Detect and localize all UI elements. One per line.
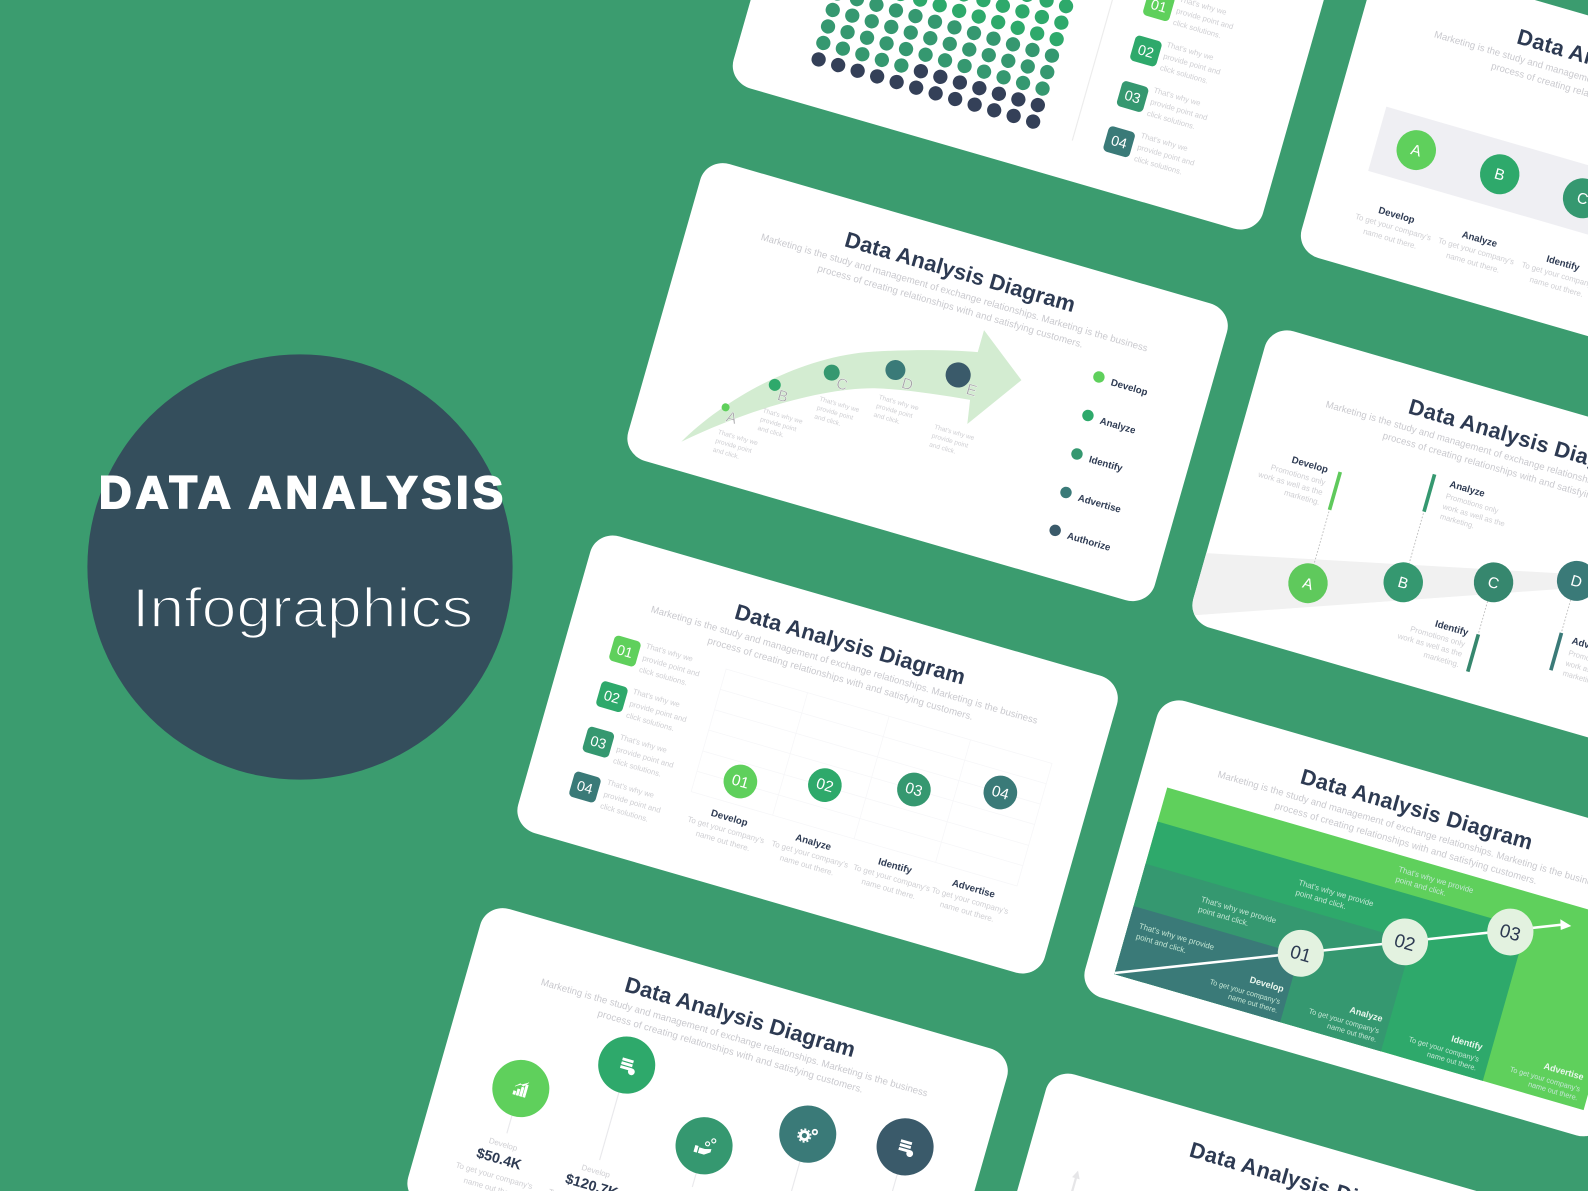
item: develop: Develop <box>1290 455 1329 476</box>
legend item 03: That's why we <box>619 733 668 755</box>
heading: data analysis: DATA ANALYSIS <box>99 467 503 518</box>
marker letters: D <box>900 375 915 394</box>
numbered circles: 03 <box>1497 919 1523 945</box>
grey wedge <box>1189 451 1588 743</box>
panel: curved arrow slide <box>622 158 1233 607</box>
staircase bands <box>1114 787 1588 1110</box>
step labels: To get your company's <box>1408 1035 1480 1064</box>
step labels: Develop <box>1249 975 1285 994</box>
panel: bottom right slide <box>968 1068 1572 1191</box>
marker captions: That's why we <box>717 429 759 447</box>
marker captions: provide point <box>816 405 854 422</box>
item: develop <box>1253 447 1343 511</box>
icon circle: gears <box>772 1099 843 1170</box>
card <box>512 530 1123 979</box>
marker captions: That's why we <box>818 396 860 414</box>
icon circle: hand <box>669 1110 739 1181</box>
step labels: Identify <box>1450 1034 1484 1052</box>
panel: grid slide <box>512 530 1123 979</box>
card <box>1187 325 1588 772</box>
legend item 03: 03 <box>1123 88 1142 108</box>
title: Data Analysis Diagram <box>622 972 858 1062</box>
circle <box>87 354 513 780</box>
column labels: Analyze <box>794 832 833 853</box>
legend item 03: click solutions. <box>612 756 662 779</box>
legend item 03: That's why we <box>1153 86 1202 108</box>
step labels: To get your company's <box>1509 1065 1582 1094</box>
subtitle: process of creating relationships with and satisfying customers. <box>816 263 1084 351</box>
legend item 02: That's why we <box>1166 40 1215 62</box>
title: Data Analysis Diagram <box>732 599 968 689</box>
timeline circles <box>1284 484 1588 680</box>
marker captions: provide point <box>875 403 913 420</box>
marker captions: and click. <box>928 441 957 456</box>
legend item 04: 04 <box>575 778 595 798</box>
step labels: To get your company's <box>1209 977 1282 1006</box>
connector lines <box>507 1066 898 1191</box>
legend item 02: That's why we <box>632 687 681 709</box>
marker captions: provide point <box>714 438 753 455</box>
heading: infographics: Infographics <box>132 576 473 639</box>
numbered circles: 02 <box>1392 929 1418 955</box>
grid <box>691 669 1052 886</box>
marker letters: C <box>834 375 850 395</box>
step labels: Analyze <box>1348 1005 1384 1024</box>
subtitle: process of creating relationships with and satisfying customers. <box>596 1008 864 1096</box>
step labels: name out there. <box>1227 992 1279 1015</box>
column labels: Identify <box>1545 254 1581 274</box>
item: identify: Identify <box>1434 619 1470 639</box>
step labels: To get your company's <box>1308 1006 1381 1035</box>
stat column 2 <box>544 1156 635 1191</box>
legend item 04: That's why we <box>606 778 655 800</box>
band captions: That's why we provide <box>1200 895 1278 925</box>
subtitle <box>1429 29 1588 165</box>
column labels: To get your company's <box>852 863 931 893</box>
marker letters: E <box>964 381 979 400</box>
icon circle: coins <box>591 1030 662 1100</box>
numbered circles: 01 <box>730 772 751 793</box>
lettered circles: A <box>1409 141 1424 161</box>
subtitle: Marketing is the study and management of exchange relationships. Marketing is the business <box>760 232 1149 355</box>
legend item 01: That's why we <box>645 641 694 663</box>
legend item 04: click solutions. <box>599 801 649 824</box>
panel: timeline slide <box>1187 325 1588 772</box>
timeline circles: A <box>1300 575 1316 594</box>
title: Data Analysis Diagram <box>1298 764 1536 855</box>
legend item 04: That's why we <box>1140 131 1189 153</box>
column labels: To get your company's <box>1354 212 1432 243</box>
band captions: That's why we provide <box>1297 878 1375 909</box>
legend item 02: provide point and <box>1162 52 1222 77</box>
item: develop: work as well as the <box>1256 470 1324 497</box>
column labels: name out there. <box>779 853 835 877</box>
legend: Identify <box>1088 454 1124 475</box>
legend item 02: click solutions. <box>1159 63 1209 86</box>
divider <box>1072 0 1130 141</box>
legend: Advertise <box>1077 493 1123 516</box>
step labels <box>1206 964 1586 1102</box>
dot matrix chart <box>810 0 1075 130</box>
legend item 02: provide point and <box>628 699 688 724</box>
legend item 02 <box>594 678 691 736</box>
lettered circles <box>1392 125 1588 223</box>
numbered circles: 04 <box>990 783 1011 804</box>
card <box>727 0 1341 235</box>
column labels: To get your company's <box>931 885 1010 916</box>
marker captions: That's why we <box>933 424 975 442</box>
legend item 04 <box>567 768 665 826</box>
item: analyze: Analyze <box>1448 479 1487 500</box>
marker captions: and click. <box>757 425 785 439</box>
item: develop: Promotions only <box>1270 463 1327 487</box>
band captions: point and click. <box>1295 888 1347 911</box>
marker letters: A <box>724 409 739 428</box>
legend item 01 <box>607 632 704 690</box>
marker captions: That's why we <box>878 394 920 412</box>
card <box>1295 0 1588 402</box>
trend arrow <box>1115 804 1572 1092</box>
stat column 1 <box>451 1129 543 1191</box>
card <box>1079 695 1588 1142</box>
subtitle: process of creating relationships with and satisfying customers. <box>1273 801 1538 887</box>
subtitle: Marketing is the study and management of exchange relationships. Marketing is the business <box>540 977 929 1100</box>
column labels: Develop <box>710 808 749 829</box>
numbered circles: 03 <box>903 780 924 801</box>
marker captions: That's why we <box>762 407 804 426</box>
marker captions: and click. <box>813 413 842 428</box>
card <box>968 1068 1572 1191</box>
item: analyze: work as well as the <box>1441 502 1506 528</box>
column labels: Advertise <box>951 878 997 901</box>
marker captions: provide point <box>759 416 797 433</box>
timeline circles: B <box>1396 574 1410 593</box>
legend: Develop <box>1109 377 1149 399</box>
column labels: To get your company's <box>1437 236 1515 267</box>
item: develop: marketing. <box>1283 488 1321 507</box>
legend item 01: provide point and <box>1175 6 1234 31</box>
item: advertise <box>1548 632 1588 695</box>
legend item 01: 01 <box>615 642 635 662</box>
legend item 03 <box>580 723 678 781</box>
legend item 04: provide point and <box>1136 143 1196 168</box>
panel: dot matrix slide <box>727 0 1341 235</box>
legend item 01: click solutions. <box>1172 18 1222 40</box>
marker captions: and click. <box>712 447 740 461</box>
numbered circles <box>720 701 1021 873</box>
column labels: name out there. <box>1529 275 1584 299</box>
panel: staircase slide <box>1079 695 1588 1142</box>
lettered circles: B <box>1492 165 1507 185</box>
legend item 02: click solutions. <box>625 711 675 733</box>
item: identify: work as well as the <box>1396 631 1464 659</box>
item: identify <box>1393 609 1481 672</box>
card <box>402 902 1013 1191</box>
subtitle: process of creating relationships with and satisfying customers. <box>706 636 974 723</box>
step labels: name out there. <box>1326 1021 1378 1044</box>
legend item 01 <box>1141 0 1238 43</box>
item: analyze <box>1421 474 1512 538</box>
step labels: name out there. <box>1426 1049 1478 1072</box>
band captions: point and click. <box>1135 932 1188 955</box>
panel: band circles slide <box>1295 0 1588 402</box>
band captions: point and click. <box>1197 905 1250 928</box>
step labels: Advertise <box>1543 1061 1585 1082</box>
legend item 04: 04 <box>1109 133 1129 153</box>
legend item 04: provide point and <box>603 790 662 815</box>
numbered circles: 01 <box>1288 941 1314 967</box>
item: analyze: Promotions only <box>1445 491 1500 515</box>
column labels: name out there. <box>939 900 995 924</box>
column labels: Develop <box>1377 205 1416 226</box>
band captions: That's why we provide <box>1397 865 1475 895</box>
item: identify: marketing. <box>1422 650 1460 669</box>
band captions: That's why we provide <box>1138 921 1216 952</box>
card <box>622 158 1233 607</box>
marker captions: and click. <box>873 412 901 426</box>
legend item 03: click solutions. <box>1146 109 1196 131</box>
arrow <box>681 258 1032 528</box>
arrow markers <box>721 302 974 474</box>
stat column 1: Develop <box>488 1136 519 1153</box>
legend: Analyze <box>1098 416 1137 437</box>
column labels <box>683 802 1013 927</box>
legend item 02: 02 <box>602 688 622 708</box>
axis arrow <box>1054 1169 1082 1191</box>
column labels: To get your company's <box>686 815 765 845</box>
column labels: name out there. <box>860 877 917 901</box>
marker letters <box>724 319 979 490</box>
legend item 03: provide point and <box>1149 97 1209 122</box>
numbered circles: 02 <box>814 775 835 796</box>
stat column 2: Develop <box>581 1163 612 1180</box>
icon circle: coins <box>870 1111 940 1182</box>
numbered circles <box>1272 849 1539 1037</box>
step labels: name out there. <box>1527 1079 1579 1102</box>
stat column 1: $50.4K <box>475 1145 524 1174</box>
grey band <box>1368 107 1588 295</box>
legend item 03: 03 <box>588 733 608 753</box>
subtitle <box>1320 399 1588 535</box>
stat column 1: To get your company's <box>455 1160 534 1191</box>
marker letters: B <box>775 387 790 406</box>
marker captions <box>712 354 979 522</box>
column labels <box>1351 199 1588 302</box>
badge: title circle <box>87 354 513 780</box>
legend <box>1048 370 1157 554</box>
item: identify: Promotions only <box>1409 624 1466 649</box>
legend item 04 <box>1102 122 1199 179</box>
legend item 01: provide point and <box>641 653 701 679</box>
legend item 03 <box>1115 77 1212 134</box>
legend item 04: click solutions. <box>1133 154 1183 177</box>
legend: Authorize <box>1066 531 1112 554</box>
column labels: name out there. <box>695 829 751 853</box>
legend item 03: provide point and <box>615 745 675 770</box>
column labels: name out there. <box>1445 251 1501 275</box>
item: analyze: marketing. <box>1439 512 1475 530</box>
dotted connectors <box>1308 488 1582 655</box>
band captions: point and click. <box>1395 875 1447 898</box>
title: Data Analysis Diagram <box>842 227 1078 317</box>
band captions <box>1135 800 1475 1028</box>
marker captions: provide point <box>931 433 969 450</box>
legend item 02: 02 <box>1136 42 1155 62</box>
subtitle: Marketing is the study and management of exchange relationships. Marketing is the business <box>650 604 1039 727</box>
icon circle: chart <box>486 1053 556 1124</box>
timeline circles: D <box>1569 572 1584 592</box>
column labels: name out there. <box>1362 227 1418 251</box>
timeline circles: C <box>1486 574 1501 593</box>
legend item 02 <box>1128 31 1225 88</box>
legend item 01: click solutions. <box>638 665 688 687</box>
panel: icon circles slide <box>402 902 1013 1191</box>
column labels: To get your company's <box>770 839 849 870</box>
column labels: Identify <box>877 856 914 877</box>
column labels: Analyze <box>1461 229 1499 250</box>
